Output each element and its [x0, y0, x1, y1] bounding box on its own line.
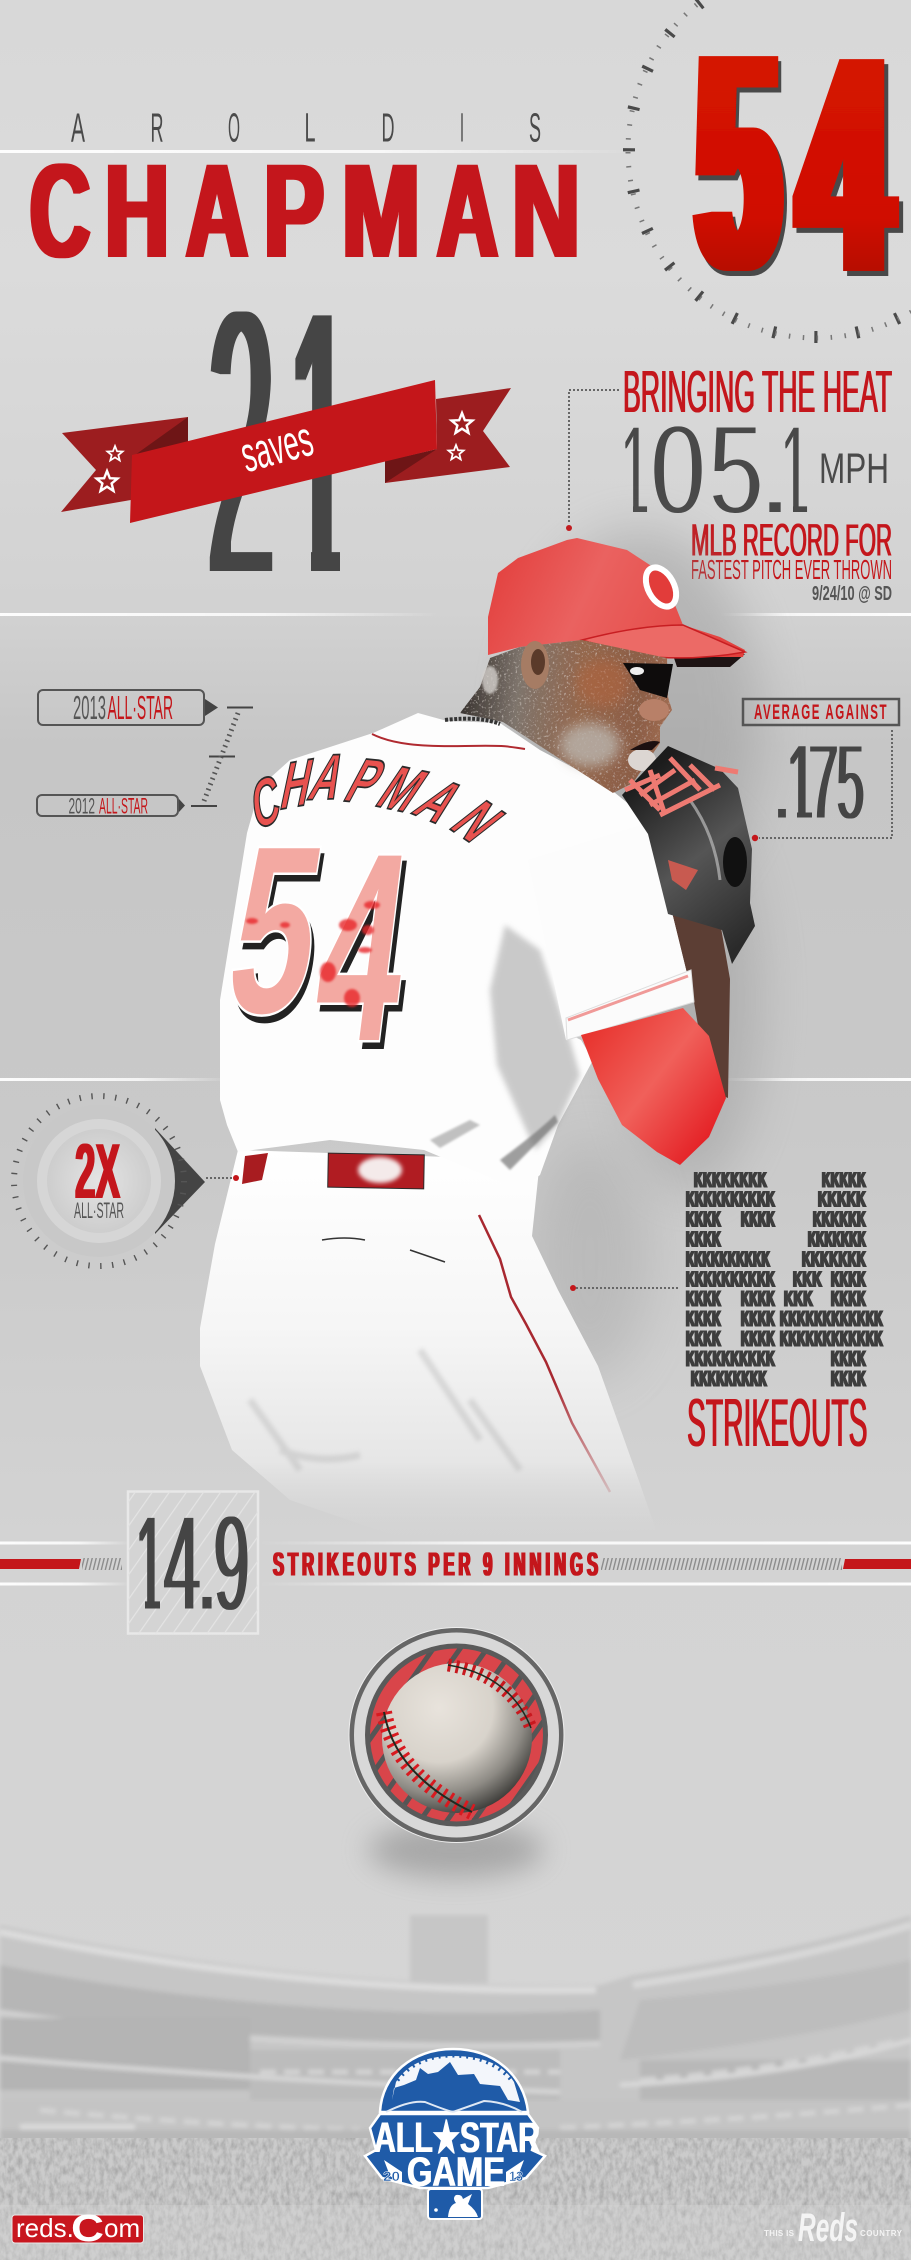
strikeouts number made of K letters: KKKKKKKKKK — [686, 1346, 775, 1372]
jersey name: P — [334, 745, 397, 816]
title: last name: A — [186, 137, 248, 286]
title: first name: O — [228, 104, 240, 150]
14.9 stat box: 1 — [136, 1487, 164, 1639]
player figure — [200, 538, 755, 1540]
reds.com logo: C — [71, 2208, 104, 2250]
strikeouts number made of K letters: KKKK — [686, 1326, 721, 1352]
strikeouts number made of K letters: KKKK — [686, 1286, 721, 1312]
all-star dial badge: 2X — [75, 1127, 120, 1215]
title: last name: N — [512, 137, 580, 286]
jersey name — [249, 740, 519, 853]
average against value: 7 — [809, 721, 838, 842]
strikeouts number made of K letters: KKKKK — [822, 1166, 866, 1192]
title: first name: L — [304, 104, 316, 150]
title: last name: A — [437, 137, 498, 286]
all-star dial badge — [14, 1096, 205, 1266]
all-star years timeline: 2012 — [68, 794, 95, 818]
strikeouts number made of K letters: KKKKKKKKKK — [686, 1266, 775, 1292]
title: last name: P — [264, 137, 324, 286]
14.9 stat box — [128, 1487, 258, 1639]
14.9 stat box: 4 — [164, 1487, 200, 1639]
all-star years timeline — [37, 689, 253, 818]
this is reds country logo: COUNTRY — [860, 2229, 903, 2238]
jersey side panel shading — [430, 925, 580, 1170]
sleeve hem — [566, 970, 694, 1040]
title: first name — [71, 104, 541, 150]
strikeouts number made of K letters: KKKKKKKKKK — [686, 1246, 770, 1272]
title: last name: M — [342, 137, 420, 286]
this is reds country logo: Reds — [798, 2206, 858, 2250]
all-star years timeline: ALL·STAR — [108, 689, 173, 726]
player shadow — [520, 530, 760, 1380]
strikeouts number made of K letters: KKKKKKKK — [694, 1166, 767, 1192]
fastest pitch text block: . — [760, 399, 790, 542]
jersey name: N — [436, 790, 519, 853]
head and neck — [445, 640, 673, 793]
title: last name — [30, 137, 580, 286]
all-star years timeline: ALL·STAR — [99, 794, 148, 818]
connector: fastest pitch — [566, 390, 619, 531]
strikeouts number made of K letters: KKKK — [831, 1366, 866, 1392]
saves stat: big number: 2 — [209, 227, 273, 658]
belt — [242, 1153, 424, 1189]
baseball badge — [349, 1628, 564, 1878]
player forearm — [668, 914, 730, 1098]
strikeouts number made of K letters — [686, 1166, 883, 1392]
strikeouts number made of K letters: KKKK — [686, 1306, 721, 1332]
title: first name: I — [460, 104, 464, 150]
jersey number: 4 — [303, 798, 423, 1098]
14.9 stat box: . — [198, 1487, 216, 1639]
average against value — [778, 746, 864, 818]
jersey number: 5 — [217, 805, 341, 1070]
all-star game logo — [365, 2049, 545, 2219]
all-star game logo: 20 — [383, 2168, 400, 2184]
reds.com logo: reds. — [16, 2213, 74, 2243]
sleeve — [528, 822, 694, 1040]
jersey name: A — [301, 740, 356, 814]
average against value: 1 — [787, 721, 815, 842]
fastest pitch text block — [621, 359, 892, 605]
text: 1 — [290, 227, 350, 658]
strikeouts number made of K letters: KKK — [784, 1286, 813, 1312]
reds.com logo: om — [104, 2213, 140, 2243]
this is reds country logo: THIS IS — [764, 2229, 795, 2238]
all-star game logo: ALL★STAR — [374, 2114, 540, 2162]
jersey number 54: 5 — [701, 0, 781, 339]
title: last name: C — [30, 137, 90, 286]
ribbon: saves: saves — [235, 410, 319, 483]
all-star game logo: 13 — [509, 2168, 523, 2184]
number red blotches — [246, 901, 380, 1007]
average against label: AVERAGE AGAINST — [754, 700, 887, 724]
saves stat: big number — [210, 312, 340, 571]
baseball — [382, 1663, 532, 1813]
fastest pitch text block: 1 — [781, 399, 809, 542]
strikeouts per 9 band — [0, 1542, 911, 1586]
tick dial behind jersey number — [628, 0, 911, 338]
cap — [488, 538, 745, 667]
strikeouts number made of K letters: KKKKK — [818, 1186, 866, 1212]
ribbon: saves — [61, 380, 511, 523]
text: 5 — [837, 721, 864, 842]
title: first name: R — [150, 104, 164, 150]
strikeouts number made of K letters: KKKK — [741, 1286, 775, 1312]
text: S — [529, 104, 541, 150]
strikeouts number made of K letters: KKKKKK — [813, 1206, 866, 1232]
fastest pitch text block: 5 — [709, 399, 763, 542]
player pants — [200, 1150, 656, 1540]
all-star game logo: GAME — [407, 2148, 505, 2195]
jersey name: A — [400, 768, 480, 834]
average against value: . — [775, 721, 789, 842]
jersey number: 4 — [307, 805, 427, 1105]
jersey name: H — [275, 744, 319, 824]
14.9 stat box: 9 — [214, 1487, 249, 1639]
strikeouts number made of K letters: KKKK — [831, 1346, 866, 1372]
strikeouts number made of K letters: KKKK — [686, 1206, 721, 1232]
reds.com logo — [12, 2208, 144, 2250]
strikeouts number made of K letters: KKKK — [831, 1266, 866, 1292]
all-star dial badge: ALL·STAR — [74, 1198, 124, 1223]
jersey number — [214, 798, 427, 1105]
title: first name: A — [71, 104, 85, 150]
strikeouts number made of K letters: KKKKKKKKKK — [686, 1186, 775, 1212]
collar trim — [372, 734, 525, 749]
strikeouts number made of K letters: KKKK — [741, 1326, 775, 1352]
horizontal divider lines — [0, 150, 911, 1081]
strikeouts number made of K letters: KKKKKKKKK — [691, 1366, 767, 1392]
strikeouts number made of K letters: KKKK — [741, 1206, 775, 1232]
all-star years timeline: 2013 — [73, 689, 106, 726]
fastest pitch text block: 0 — [651, 399, 705, 542]
strikeouts number made of K letters: KKKK — [686, 1226, 721, 1252]
fastest pitch text block: 1 — [621, 399, 649, 542]
jersey name: C — [249, 759, 283, 845]
strikeouts number made of K letters: KKK — [793, 1266, 822, 1292]
strikeouts number made of K letters: KKKK — [741, 1306, 775, 1332]
glove — [622, 746, 755, 964]
connector: strikeouts — [570, 1285, 680, 1291]
arm sleeve — [581, 1008, 726, 1165]
strikeouts per 9 band: STRIKEOUTS PER 9 INNINGS — [273, 1545, 598, 1583]
connector: average against — [752, 730, 892, 841]
hem stripe — [568, 976, 688, 1020]
pants piping and folds — [250, 1215, 610, 1492]
player jersey — [220, 713, 694, 1190]
title: last name: H — [105, 137, 169, 286]
jersey number 54: 5 — [698, 0, 778, 334]
connector: all-star — [206, 1175, 239, 1181]
jersey name: M — [365, 754, 440, 824]
strikeouts number made of K letters: KKKK — [831, 1286, 866, 1312]
title: first name: D — [382, 104, 394, 150]
stadium backdrop — [0, 1915, 911, 2260]
jersey number: 5 — [214, 798, 338, 1063]
